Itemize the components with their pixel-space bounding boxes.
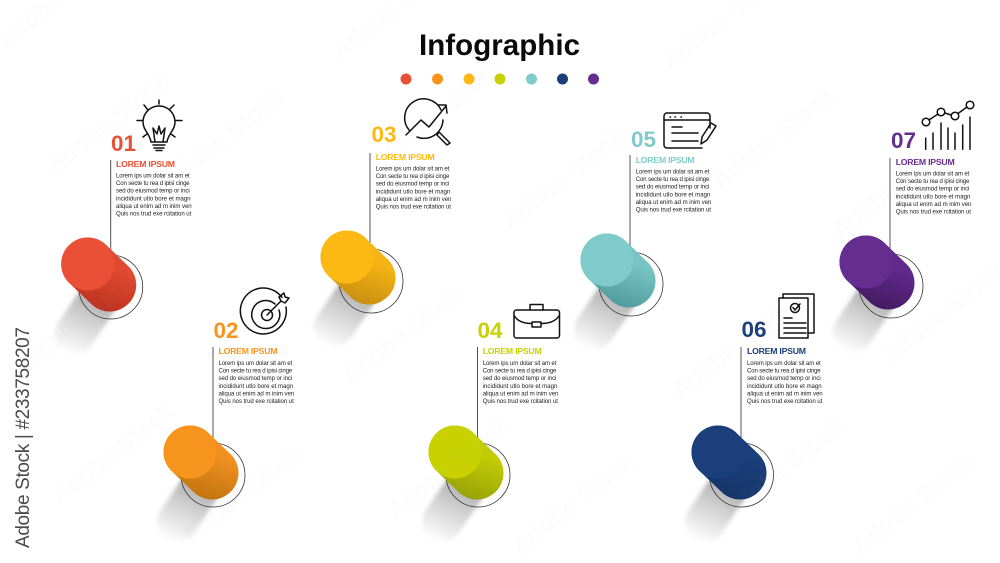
number 03: 03: [372, 122, 397, 147]
step 03: [320, 99, 451, 327]
body text: incididunt utlo bore et magn: [896, 193, 970, 200]
body text: Con secte tu rea d ipisi cinge: [747, 368, 821, 375]
step 05: [580, 113, 716, 330]
body text: incididunt utlo bore et magn: [376, 188, 450, 195]
pin 07: [840, 158, 923, 332]
watermark: Adobe Stock: [42, 68, 175, 180]
step 06: [692, 294, 823, 522]
body text: Lorem ips um dolar sit am et: [636, 168, 710, 176]
heading: LOREM IPSUM: [636, 155, 695, 165]
watermark: Adobe Stock: [177, 438, 310, 550]
watermark: Adobe Stock: [17, 263, 150, 375]
icon: document with check: [779, 294, 814, 338]
body text: Lorem ips um dolar sit am et: [218, 360, 292, 367]
pin 01: [61, 160, 143, 334]
watermark: Adobe Stock: [497, 123, 630, 235]
body text: [896, 170, 971, 216]
heading: LOREM IPSUM: [896, 157, 955, 167]
body text: Quis nos trud exe rcitation ut: [636, 206, 711, 214]
watermark: Adobe Stock: [337, 278, 470, 390]
number 07: 07: [891, 128, 916, 153]
watermark: Adobe Stock: [667, 293, 800, 405]
icon: magnifier with rising arrow: [405, 99, 450, 145]
icon: light bulb: [137, 100, 182, 150]
body text: sed do eiusmod temp or inci: [116, 188, 190, 195]
watermark: Adobe Stock: [382, 413, 515, 525]
watermark: Adobe Stock: [847, 448, 980, 560]
step 07: [840, 101, 974, 332]
pin 04: [428, 347, 510, 522]
number 02: 02: [214, 318, 239, 343]
body text: incididunt utlo bore et magn: [747, 383, 822, 390]
body text: incididunt utlo bore et magn: [483, 383, 557, 390]
body text: sed do eiusmod temp or inci: [747, 375, 821, 382]
number 01: 01: [111, 131, 136, 156]
body text: Quis nos trud exe rcitation ut: [376, 204, 451, 210]
body text: sed do eiusmod temp or inci: [483, 375, 556, 382]
colour dot row: [400, 74, 599, 84]
title: Infographic: [419, 29, 580, 62]
body text: incididunt utlo bore et magn: [116, 195, 191, 202]
body text: Quis nos trud exe rcitation ut: [116, 210, 192, 218]
step 04: [428, 304, 560, 522]
body text: Con secte tu rea d ipisi cinge: [116, 180, 190, 187]
body text: Con secte tu rea d ipisi cinge: [636, 176, 710, 183]
body text: sed do eiusmod temp or inci: [218, 375, 292, 382]
body text: Con secte tu rea d ipisi cinge: [896, 178, 970, 185]
body text: [116, 172, 192, 218]
watermark: Adobe Stock: [827, 133, 960, 245]
body text: Quis nos trud exe rcitation ut: [896, 208, 971, 216]
body text: sed do eiusmod temp or inci: [636, 184, 709, 191]
side stock credit: Adobe Stock | #233758207: [13, 327, 34, 548]
body text: Lorem ips um dolar sit am et: [896, 170, 970, 178]
icon: target with dart: [240, 288, 289, 334]
heading: LOREM IPSUM: [376, 152, 435, 162]
pin 03: [320, 153, 403, 327]
heading: LOREM IPSUM: [218, 346, 278, 356]
body text: Quis nos trud exe rcitation ut: [218, 398, 294, 405]
body text: [483, 360, 558, 405]
body text: Con secte tu rea d ipisi cinge: [483, 368, 557, 375]
watermark: Adobe Stock: [717, 413, 850, 525]
icon: bar and line chart: [922, 101, 974, 149]
body text: incididunt utlo bore et magn: [218, 383, 293, 390]
body text: aliqua ut enim ad m inim ven: [218, 390, 294, 397]
body text: [747, 360, 823, 405]
body text: aliqua ut enim ad m inim ven: [376, 196, 451, 203]
watermark: Adobe Stock: [507, 448, 640, 560]
number 04: 04: [478, 318, 503, 343]
watermark: Adobe Stock: [157, 83, 290, 195]
body text: Quis nos trud exe rcitation ut: [747, 398, 823, 405]
icon: briefcase: [514, 304, 560, 338]
body text: Lorem ips um dolar sit am et: [483, 360, 557, 367]
heading: LOREM IPSUM: [116, 159, 175, 169]
body text: Lorem ips um dolar sit am et: [376, 166, 450, 172]
body text: [376, 166, 451, 210]
body text: aliqua ut enim ad m inim ven: [896, 201, 971, 208]
step 01: [61, 100, 192, 334]
body text: sed do eiusmod temp or inci: [896, 186, 969, 193]
pin 06: [692, 347, 774, 522]
body text: aliqua ut enim ad m inim ven: [116, 203, 192, 210]
body text: aliqua ut enim ad m inim ven: [483, 390, 558, 397]
body text: Lorem ips um dolar sit am et: [747, 360, 821, 367]
pin 02: [164, 347, 245, 522]
watermark: Adobe Stock: [47, 398, 180, 510]
step 02: [164, 288, 294, 522]
body text: incididunt utlo bore et magn: [636, 191, 710, 198]
body text: sed do eiusmod temp or inci: [376, 181, 449, 188]
icon: browser window with pencil: [664, 113, 716, 148]
number 06: 06: [742, 317, 767, 342]
heading: LOREM IPSUM: [483, 346, 542, 356]
body text: [636, 168, 711, 214]
body text: Con secte tu rea d ipisi cinge: [376, 173, 450, 180]
body text: Lorem ips um dolar sit am et: [116, 172, 190, 180]
number 05: 05: [631, 127, 656, 152]
body text: Quis nos trud exe rcitation ut: [483, 398, 558, 405]
watermark: Adobe Stock: [707, 83, 840, 195]
body text: aliqua ut enim ad m inim ven: [636, 199, 711, 206]
body text: Con secte tu rea d ipisi cinge: [218, 368, 293, 375]
watermark: Adobe Stock: [377, 53, 510, 165]
pin 05: [580, 155, 663, 330]
body text: aliqua ut enim ad m inim ven: [747, 390, 823, 397]
heading: LOREM IPSUM: [747, 346, 806, 356]
body text: [218, 360, 294, 405]
